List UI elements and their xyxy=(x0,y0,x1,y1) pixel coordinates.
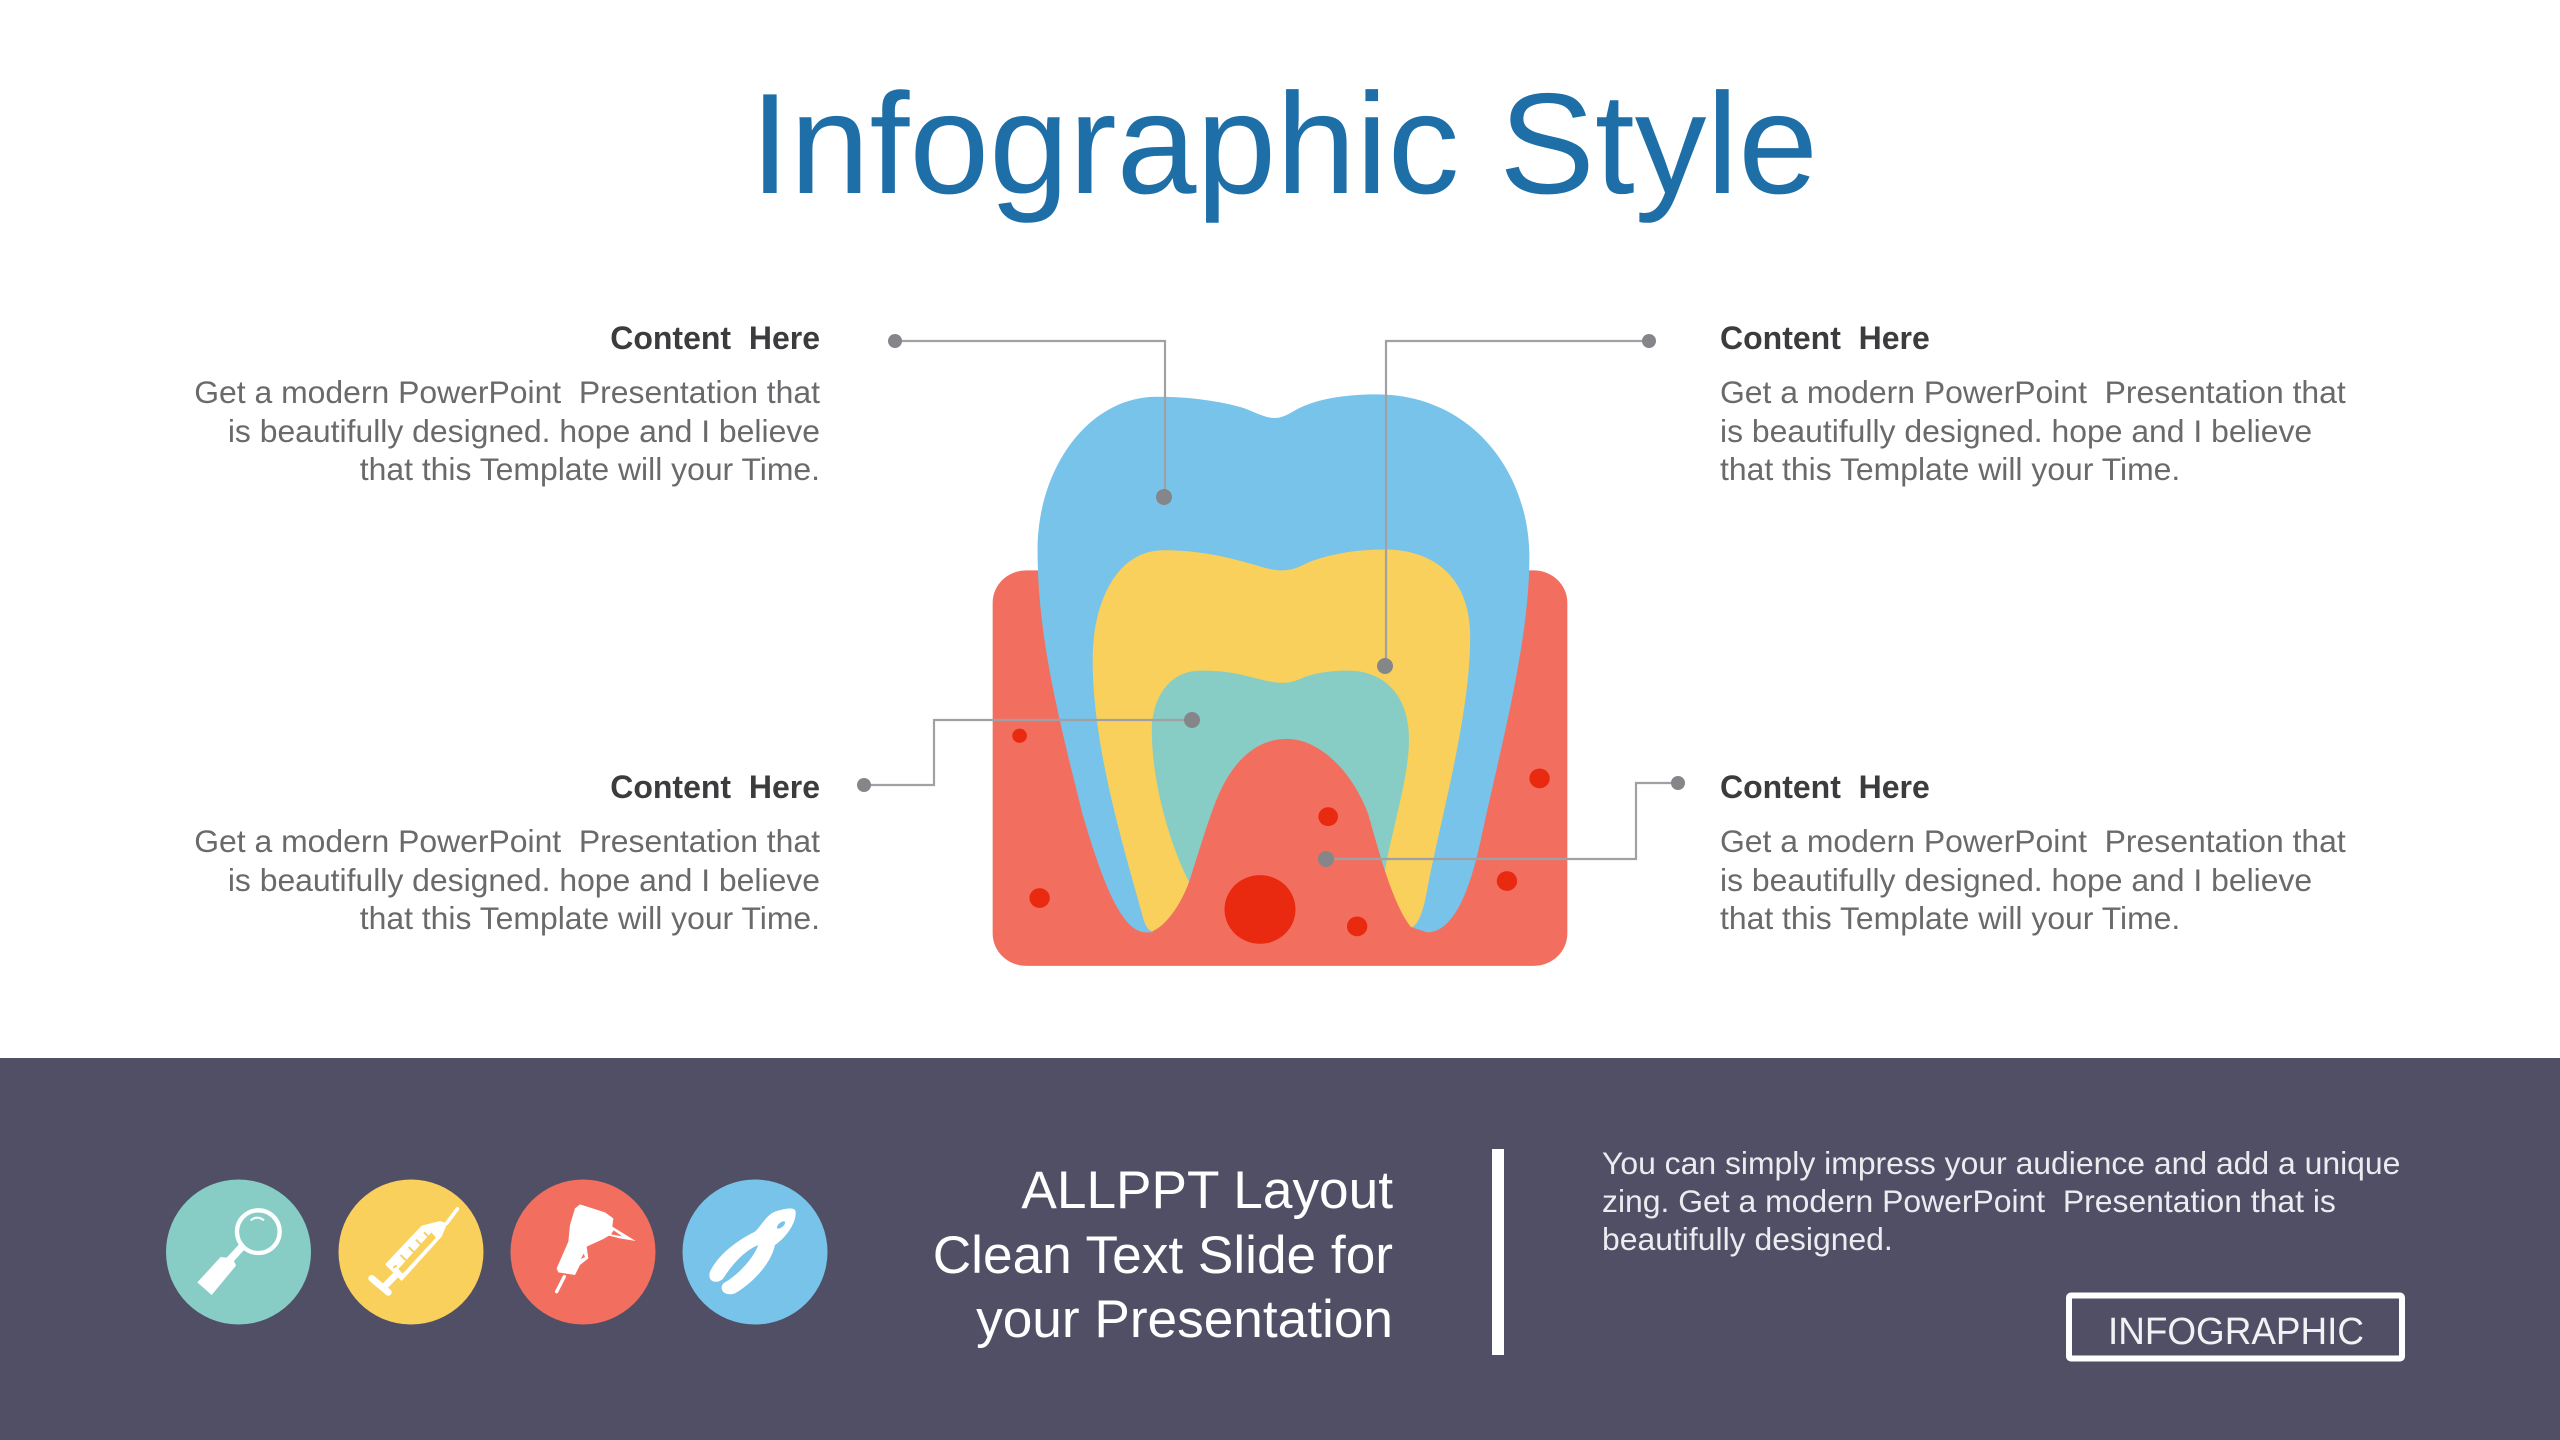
title: Infographic Style xyxy=(750,64,1818,224)
vertical divider xyxy=(1492,1149,1504,1355)
icon: syringe xyxy=(338,1180,484,1324)
leader top right xyxy=(1377,334,1656,674)
tooth diagram xyxy=(993,394,1567,966)
text block bottom left: Content Here xyxy=(610,769,820,805)
bottom band xyxy=(0,1058,2560,1440)
text block top left: that this Template will your Time. xyxy=(360,451,820,487)
text block top left: is beautifully designed. hope and I believe xyxy=(228,413,820,449)
description paragraph: zing. Get a modern PowerPoint Presentation that is xyxy=(1602,1183,2336,1219)
description paragraph: You can simply impress your audience and add a unique xyxy=(1602,1145,2400,1181)
text block bottom right: Content Here xyxy=(1720,769,1930,805)
text block top left: Get a modern PowerPoint Presentation that xyxy=(194,374,820,410)
gum xyxy=(993,570,1567,966)
text block top right: Get a modern PowerPoint Presentation that xyxy=(1720,374,2346,410)
text block bottom left: that this Template will your Time. xyxy=(360,900,820,936)
icon: dental drill xyxy=(510,1180,656,1324)
leader top left xyxy=(888,334,1172,505)
text block bottom right: Get a modern PowerPoint Presentation that xyxy=(1720,823,2346,859)
text block bottom left: is beautifully designed. hope and I believe xyxy=(228,862,820,898)
icon: magnifier xyxy=(166,1180,311,1324)
red spots xyxy=(1012,729,1550,944)
button xyxy=(2069,1296,2402,1358)
button: INFOGRAPHIC xyxy=(2108,1311,2364,1353)
gum between roots xyxy=(1153,739,1427,952)
icon: forceps xyxy=(682,1180,828,1324)
tooth dentin xyxy=(1093,549,1470,931)
text block top right: Content Here xyxy=(1720,320,1930,356)
text block top right xyxy=(1720,320,2346,487)
text block top right: that this Template will your Time. xyxy=(1720,451,2180,487)
text block bottom left xyxy=(194,769,820,936)
tooth pulp xyxy=(1152,671,1409,881)
layout heading xyxy=(933,1161,1393,1349)
text block bottom right: that this Template will your Time. xyxy=(1720,900,2180,936)
text block bottom right xyxy=(1720,769,2346,936)
text block bottom right: is beautifully designed. hope and I believe xyxy=(1720,862,2312,898)
tooth enamel xyxy=(1038,394,1529,932)
layout heading: Clean Text Slide for xyxy=(933,1226,1393,1285)
description paragraph: beautifully designed. xyxy=(1602,1221,1893,1257)
text block top left: Content Here xyxy=(610,320,820,356)
leader bottom right xyxy=(1318,776,1685,867)
text block bottom left: Get a modern PowerPoint Presentation that xyxy=(194,823,820,859)
text block top left xyxy=(194,320,820,487)
layout heading: your Presentation xyxy=(976,1290,1393,1349)
text block top right: is beautifully designed. hope and I believe xyxy=(1720,413,2312,449)
description paragraph xyxy=(1602,1145,2400,1257)
layout heading: ALLPPT Layout xyxy=(1021,1161,1393,1220)
leader bottom left xyxy=(857,712,1200,792)
